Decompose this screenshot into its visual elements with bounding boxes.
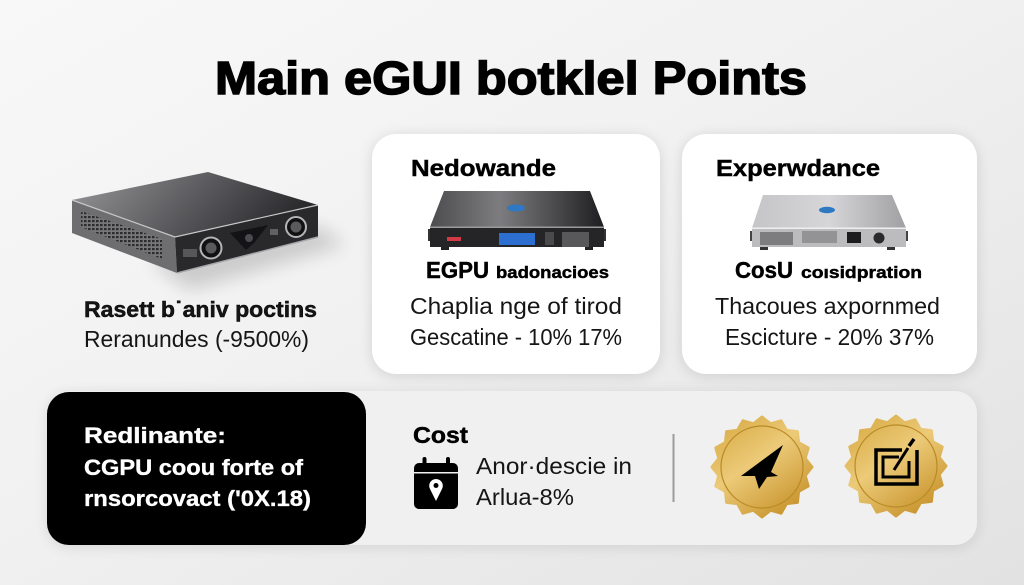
subheading: CosU xyxy=(735,257,793,283)
body text: Thacoues axpornmed xyxy=(715,293,940,319)
heading: Nedowande xyxy=(411,155,556,181)
subheading xyxy=(735,257,922,283)
subheading: badonacioes xyxy=(496,263,609,282)
label: product value: Reranundes (-9500%) xyxy=(84,326,309,352)
callout: black summary panel: CGPU coou forte of xyxy=(84,455,304,480)
panel: Nedowande card xyxy=(372,134,660,376)
cost description: Arlua-8% xyxy=(476,484,574,510)
label: product name: Rasett b˙aniv poctins xyxy=(84,297,317,322)
panel: product summary xyxy=(72,172,345,352)
subheading: coısidpration xyxy=(801,263,922,282)
badge: navigation arrow xyxy=(712,417,812,517)
heading: Experwdance xyxy=(716,155,880,181)
subheading: EGPU xyxy=(426,257,489,283)
panel: bottom cost bar xyxy=(47,391,977,547)
cost description xyxy=(476,453,632,510)
callout: black summary panel: rnsorcovact ('0X.18) xyxy=(84,486,311,511)
body text xyxy=(715,293,940,350)
body text: Escicture - 20% 37% xyxy=(725,324,934,350)
subheading xyxy=(426,257,609,283)
badge: edit square xyxy=(846,416,946,516)
device: angled grey hardware unit xyxy=(72,172,345,290)
body text xyxy=(410,293,622,350)
body text: Gescatine - 10% 17% xyxy=(410,324,622,350)
title: Main eGUI botklel Points xyxy=(215,52,807,104)
panel: Experwdance card xyxy=(682,134,977,376)
body text: Chaplia nge of tirod xyxy=(410,293,622,319)
callout: black summary panel: Redlinante: xyxy=(84,423,226,448)
device: silver rack unit xyxy=(750,195,908,250)
cost heading: Cost xyxy=(413,422,468,448)
icon: calendar with map pin xyxy=(414,457,458,509)
cost description: Anor·descie in xyxy=(476,453,632,479)
callout: black summary panel xyxy=(47,392,366,545)
device: dark rack unit xyxy=(428,191,606,250)
